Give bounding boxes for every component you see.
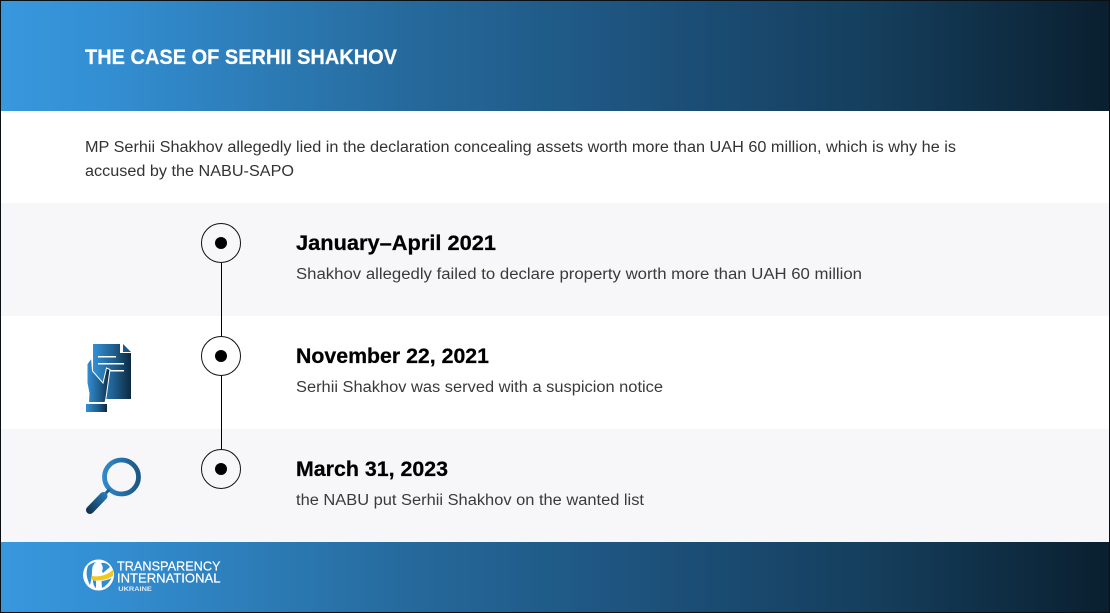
event 1: January–April 2021 — [296, 232, 496, 255]
event 3: March 31, 2023 — [296, 458, 448, 481]
event 1 — [296, 232, 862, 283]
logo globe — [83, 560, 114, 590]
intro text: MP Serhii Shakhov allegedly lied in the declaration concealing assets worth more than UAH 60 million, which is why he is — [85, 139, 956, 156]
logo wordmark: TRANSPARENCY — [117, 558, 221, 574]
timeline — [202, 224, 240, 488]
panel: row 3 background — [0, 429, 1110, 542]
intro text — [85, 139, 956, 180]
intro text: accused by the NABU-SAPO — [85, 163, 294, 180]
logo: Transparency International Ukraine — [83, 558, 221, 593]
icon: hand holding document — [86, 344, 131, 412]
title: THE CASE OF SERHII SHAKHOV — [85, 46, 397, 69]
icon: magnifying glass — [90, 460, 138, 510]
event 1: Shakhov allegedly failed to declare property worth more than UAH 60 million — [296, 266, 862, 283]
header band — [0, 0, 1110, 111]
footer band — [0, 542, 1110, 613]
logo wordmark: INTERNATIONAL — [117, 570, 220, 586]
panel: row 1 background — [0, 203, 1110, 316]
timeline marker 3 — [202, 450, 240, 488]
event 2: Serhii Shakhov was served with a suspicion notice — [296, 379, 663, 396]
timeline marker 1 — [202, 224, 240, 262]
timeline marker 2 — [202, 336, 240, 376]
event 3 — [296, 458, 645, 509]
event 2: November 22, 2021 — [296, 345, 489, 368]
logo wordmark: UKRAINE — [118, 586, 152, 593]
logo wordmark — [117, 558, 221, 593]
event 3: the NABU put Serhii Shakhov on the wanted list — [296, 492, 645, 509]
event 2 — [296, 345, 663, 396]
